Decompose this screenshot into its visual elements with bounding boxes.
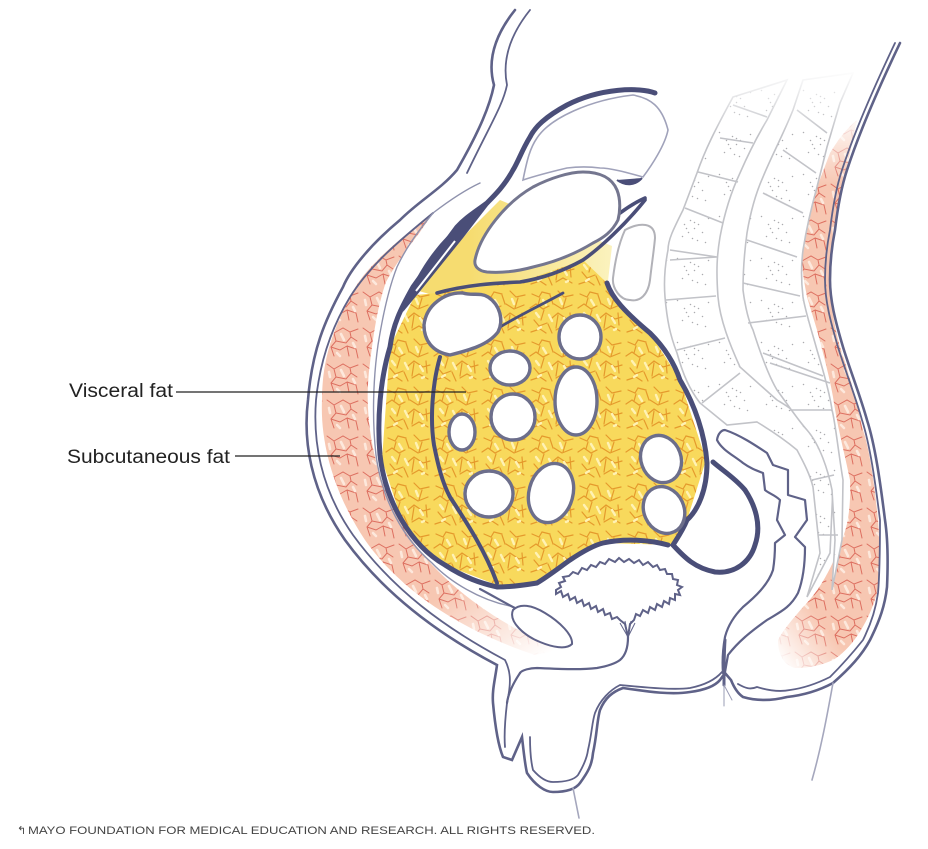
visceral fat mass [382,260,706,585]
dark wedge at front of stomach [403,203,490,312]
uterus cavity, wavy outline [556,558,682,637]
copyright: MAYO FOUNDATION FOR MEDICAL EDUCATION AND RESEARCH. ALL RIGHTS RESERVED. [28,825,595,837]
pale fat above the transverse colon [415,200,612,296]
subcutaneous fat layer, front [322,212,560,655]
label: subcutaneous fat: Subcutaneous fat [67,447,231,468]
intestine loops [424,293,692,540]
label: visceral fat: Visceral fat [69,381,174,402]
upper organs: liver and stomach [475,95,668,300]
spine top fade [700,70,865,135]
bladder-side organ [512,606,572,647]
spine: vertebral column [664,73,853,597]
body outline [307,10,900,818]
peritoneum lining [379,90,758,587]
copyright: ↰ [17,825,26,837]
pelvic organ outlines [480,430,807,706]
subcutaneous fat layer, back [778,120,880,668]
